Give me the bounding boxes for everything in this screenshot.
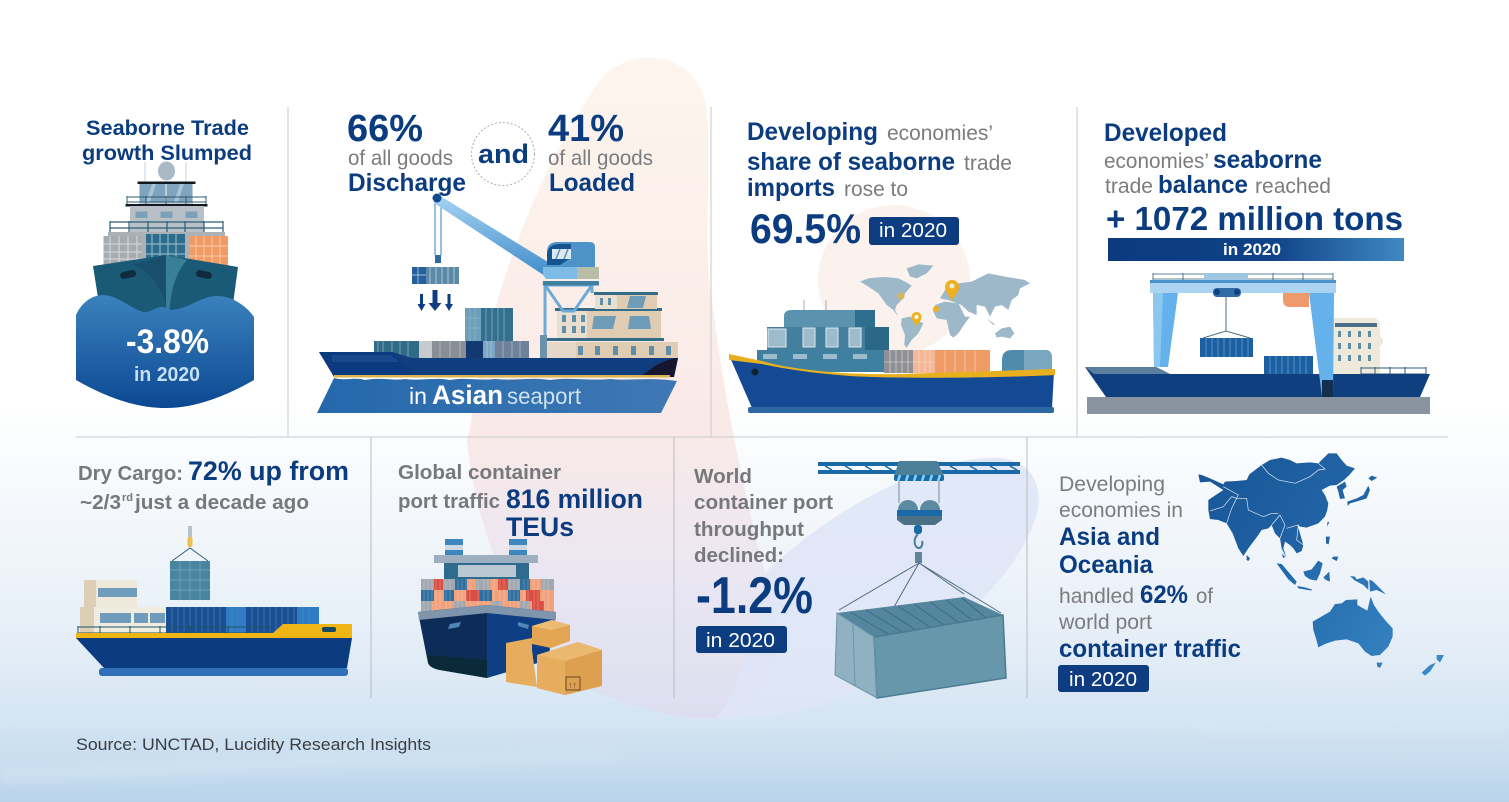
figure: -1.2% bbox=[696, 567, 813, 625]
stat: 41 percent loaded: of all goods bbox=[548, 147, 653, 170]
illustration: gantry crane and ship bbox=[1085, 273, 1430, 414]
heading: throughput bbox=[694, 519, 804, 541]
text block: Developing bbox=[1059, 473, 1165, 496]
arrows: lowering bbox=[418, 290, 453, 311]
text block: container traffic bbox=[1059, 635, 1241, 663]
heading: TEUs bbox=[506, 512, 574, 542]
crane tower bbox=[540, 242, 599, 360]
containers on deck bbox=[374, 308, 529, 358]
figure bbox=[750, 205, 959, 252]
heading bbox=[398, 462, 643, 542]
map pins bbox=[898, 280, 959, 326]
heading: imports bbox=[747, 174, 835, 202]
icon: cardboard boxes: ↑↑ bbox=[568, 680, 577, 690]
heading: declined: bbox=[694, 545, 784, 567]
heading bbox=[78, 456, 349, 514]
illustration: dry cargo ship bbox=[76, 526, 352, 676]
heading: trade bbox=[1105, 175, 1153, 198]
sea band: seaport bbox=[507, 383, 582, 409]
heading: trade bbox=[964, 152, 1012, 175]
text block: 62% bbox=[1140, 581, 1188, 609]
heading: growth Slumped bbox=[82, 140, 252, 165]
heading bbox=[82, 115, 252, 165]
illustration: crane ship bbox=[317, 194, 678, 413]
sea band bbox=[317, 378, 677, 413]
icon: ship front view bbox=[93, 162, 238, 322]
figure: in 2020 bbox=[879, 220, 947, 242]
panel: seaborne trade growth bbox=[76, 115, 254, 408]
heading: seaborne bbox=[1213, 146, 1322, 174]
panel: developed economies balance bbox=[1085, 119, 1430, 414]
text block bbox=[1058, 473, 1241, 692]
stat: 66 percent discharge: of all goods bbox=[348, 147, 453, 170]
figure bbox=[696, 567, 813, 653]
figure bbox=[1106, 200, 1404, 261]
stat: 41 percent loaded: Loaded bbox=[549, 169, 635, 197]
text block: of bbox=[1196, 585, 1213, 608]
panel: Asian seaport bbox=[317, 108, 678, 413]
heading: Dry Cargo: bbox=[78, 463, 183, 485]
text block: handled bbox=[1059, 585, 1134, 608]
panel: world container throughput bbox=[694, 461, 1020, 698]
illustration: cargo ship bbox=[729, 300, 1055, 413]
heading: share of seaborne bbox=[747, 148, 955, 176]
heading: economies’ bbox=[887, 122, 993, 145]
stat: 66 percent discharge bbox=[347, 108, 466, 197]
world map bbox=[860, 264, 1030, 348]
map: Asia bbox=[1198, 453, 1377, 561]
water with figure: -3.8% bbox=[126, 323, 209, 361]
and in dashed circle bbox=[472, 122, 534, 186]
stat: 66 percent discharge: Discharge bbox=[348, 169, 466, 197]
text block: world port bbox=[1058, 611, 1152, 634]
map: Oceania bbox=[1277, 553, 1444, 676]
heading: Developed bbox=[1104, 119, 1227, 147]
figure: 69.5% bbox=[750, 205, 861, 252]
heading: Global container bbox=[398, 462, 561, 484]
figure: in 2020 bbox=[706, 630, 775, 652]
text block: Asia and bbox=[1059, 523, 1160, 551]
text block: economies in bbox=[1059, 499, 1183, 522]
heading: ~2/3 bbox=[80, 492, 121, 514]
figure: in 2020 bbox=[1223, 240, 1281, 259]
text block: Oceania bbox=[1059, 551, 1154, 579]
heading: rose to bbox=[844, 178, 908, 201]
water with figure bbox=[76, 295, 254, 408]
heading: Seaborne Trade bbox=[86, 115, 249, 140]
panel: global container port traffic bbox=[398, 462, 643, 695]
heading bbox=[1104, 119, 1331, 199]
hull bbox=[319, 352, 678, 378]
icon: cardboard boxes bbox=[506, 620, 602, 695]
figure: + 1072 million tons bbox=[1106, 200, 1403, 237]
stat: 41 percent loaded bbox=[548, 108, 653, 197]
illustration: container ship front bbox=[418, 539, 556, 678]
heading: container port bbox=[694, 492, 833, 514]
superstructure bbox=[546, 292, 678, 359]
heading bbox=[747, 118, 1012, 202]
sea band: Asian bbox=[432, 380, 503, 410]
sea band: in bbox=[409, 383, 427, 409]
water with figure: in 2020 bbox=[134, 364, 200, 386]
panel: dry cargo bbox=[76, 456, 352, 676]
heading: balance bbox=[1158, 171, 1248, 199]
heading bbox=[694, 466, 833, 567]
source note: Source: UNCTAD, Lucidity Research Insights bbox=[76, 735, 431, 754]
heading: just a decade ago bbox=[134, 492, 309, 514]
panel: developing economies share bbox=[729, 118, 1055, 413]
panel: Asia and Oceania bbox=[1058, 453, 1444, 692]
and in dashed circle: and bbox=[478, 139, 529, 169]
text block: in 2020 bbox=[1069, 669, 1137, 691]
heading: 72% up from bbox=[188, 456, 349, 486]
decorative blob bbox=[467, 57, 1039, 719]
heading: Developing bbox=[747, 118, 878, 146]
stat: 41 percent loaded: 41% bbox=[548, 108, 624, 150]
heading: economies’ bbox=[1104, 150, 1209, 173]
heading: port traffic bbox=[398, 491, 500, 513]
heading: 816 million bbox=[506, 484, 643, 514]
heading: World bbox=[694, 466, 752, 488]
heading: rd bbox=[122, 492, 133, 504]
heading: reached bbox=[1255, 175, 1331, 198]
stat: 66 percent discharge: 66% bbox=[347, 108, 423, 150]
illustration: hoist and container bbox=[818, 461, 1020, 698]
